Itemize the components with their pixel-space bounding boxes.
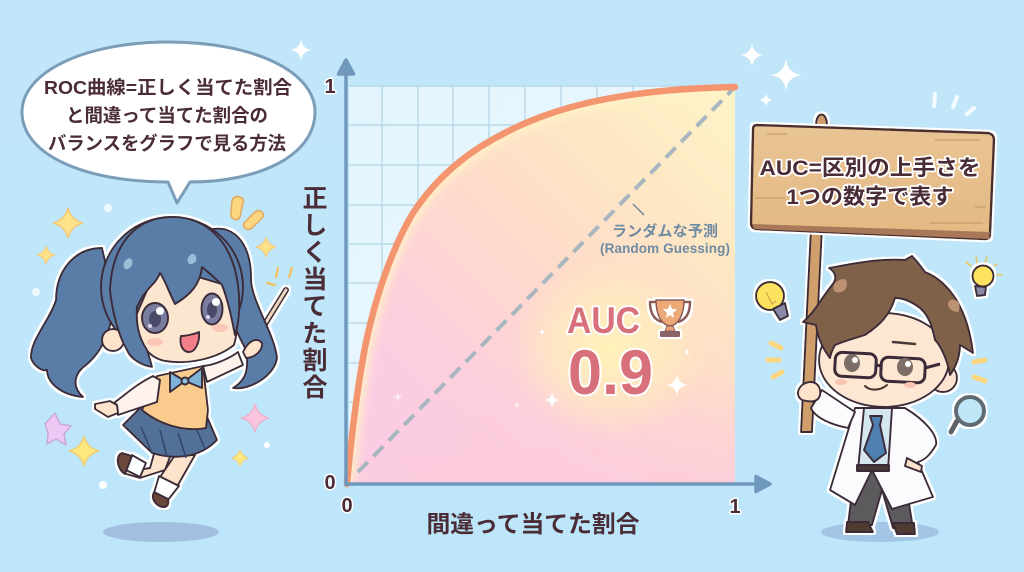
axis tick labels: 1 [324,76,336,98]
face [135,265,237,362]
girl decorations: stars [32,196,292,489]
sign text [760,156,980,209]
mouth [180,332,199,352]
blush [147,338,163,346]
random guess label: (Random Guessing) [600,241,730,256]
icon: light bulb right [972,266,994,296]
x axis arrow [346,476,770,492]
axis tick labels: 1 [729,496,741,518]
y axis arrow [338,60,354,486]
ear [102,329,124,351]
sign text: AUC=区別の上手さを [760,156,980,180]
sign text: 1つの数字で表す [786,185,954,209]
pointer wand [252,290,286,345]
raised arm [811,390,855,428]
smile [865,385,887,390]
eyes [844,354,860,372]
sparkles [393,328,690,409]
character: scientist holding sign [798,114,973,534]
vest [142,366,208,429]
belt [857,465,889,471]
icon: magnifying glass [951,397,984,432]
AUC value: AUC [567,299,640,341]
AUC value: 0.9 [568,338,653,408]
bubble text: バランスをグラフで見る方法 [48,133,286,154]
axis tick labels: 0 [324,472,336,494]
head back hair [101,217,243,357]
sign board [751,125,994,239]
AUC value [393,299,690,409]
hand on pole [798,382,820,401]
sparkles around chart top [290,39,802,107]
grid panel [349,86,735,484]
random guessing dashed diagonal [358,87,735,472]
shirt [858,408,892,470]
area under curve [340,80,740,490]
lab coat [830,408,936,509]
pants and shoes [848,466,913,528]
scientist shadow [821,522,939,542]
speech bubble [22,42,315,203]
character: girl with pointer [31,217,286,507]
icon: trophy [650,300,690,337]
eyes [142,303,168,333]
bubble text: と間違って当てた割合の [66,105,268,126]
twin tails [31,248,114,397]
sign pole [801,114,827,432]
right hand [243,340,262,358]
axis tick labels [324,76,741,518]
icon: light bulb left [756,282,788,320]
bangs [110,217,239,367]
blush [835,379,847,385]
glasses [834,352,940,383]
left arm sleeve [115,376,160,415]
hand on hip [905,458,922,472]
hair [803,256,973,375]
random guess label [600,204,730,256]
skirt [123,405,217,457]
right arm sleeve [203,352,243,382]
left hand [95,401,118,417]
chart: ROC curve [338,60,770,492]
axis tick labels: 0 [341,495,353,517]
bubble text: ROC曲線=正しく当てた割合 [44,77,293,98]
bubble text [44,77,293,154]
ROC curve line [347,87,735,484]
icon yellow marks, right [768,94,1002,381]
legs and shoes [122,450,172,478]
girl shadow [103,522,219,542]
y axis title: 正しく当てた割合 [299,185,328,401]
bow [170,368,202,392]
x axis title: 間違って当てた割合 [426,511,640,537]
eyebrows [893,342,915,344]
tie [864,416,886,462]
head [929,364,957,392]
random guess label: ランダムな予測 [612,222,718,240]
